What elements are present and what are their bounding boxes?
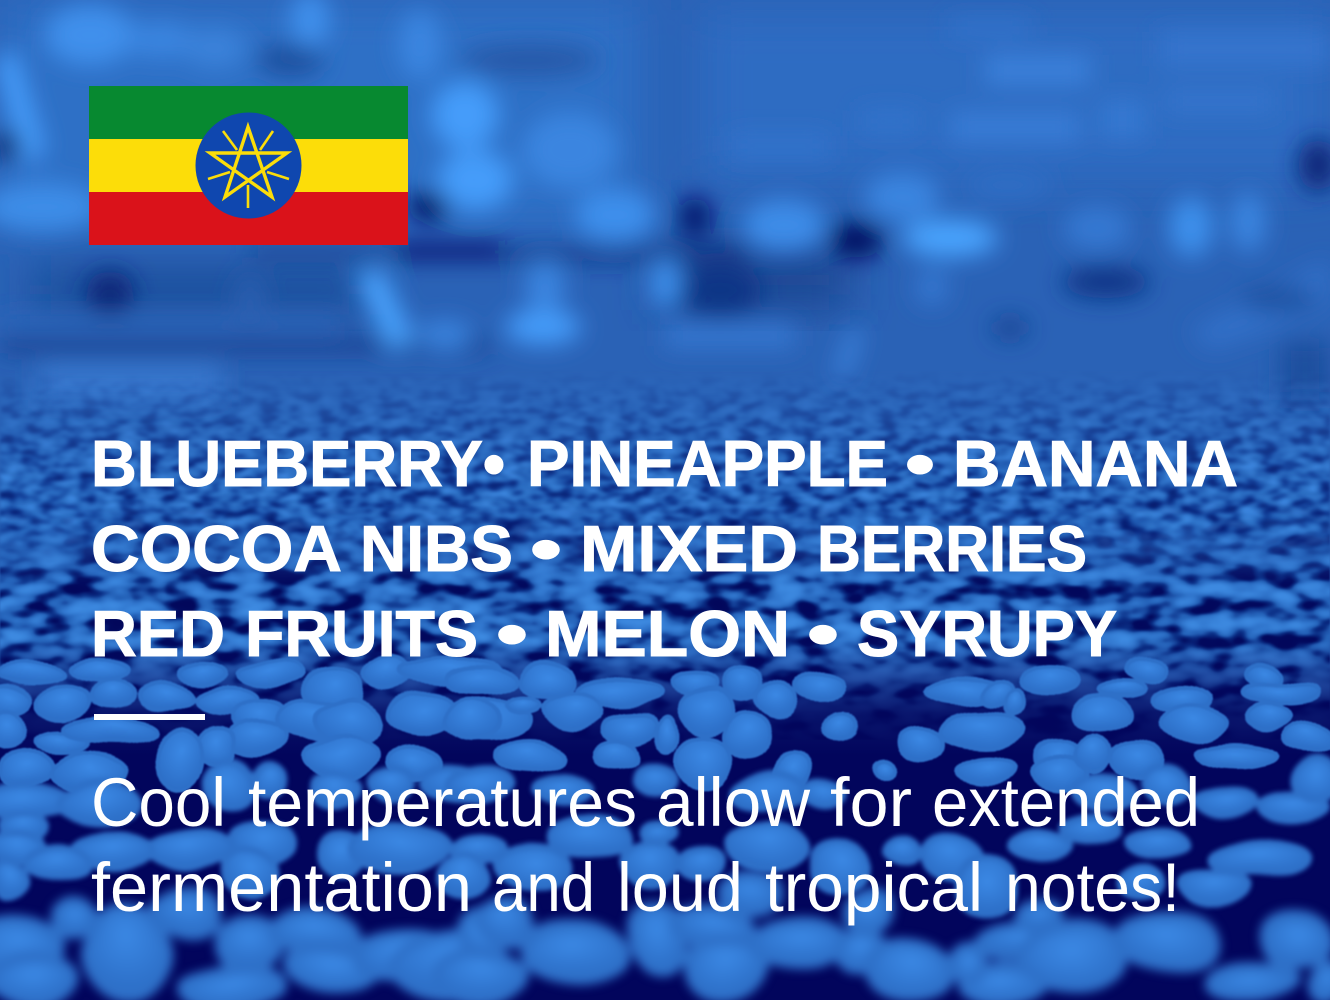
flavor notes heading: SYRUPY [857, 597, 1117, 670]
flavor notes heading: FRUITS [245, 597, 478, 670]
description text: fermentation [91, 849, 472, 926]
flavor notes heading: BERRIES [817, 512, 1087, 585]
flavor notes heading: • [530, 512, 562, 585]
description text: loud [617, 849, 743, 926]
background: small beans mid distance [0, 370, 1330, 1000]
background: sharper beans row [0, 656, 1330, 793]
flag of Ethiopia [89, 86, 408, 245]
divider rule [94, 714, 205, 720]
flavor notes heading: BANANA [953, 427, 1238, 500]
background: blurred foreground beans [0, 876, 1330, 1000]
flavor notes heading: • [807, 597, 839, 670]
description text: tropical [765, 849, 983, 926]
description text: notes! [1005, 849, 1180, 926]
description text: allow [656, 764, 810, 841]
background: mid foreground beans [0, 760, 1330, 917]
flag emblem: blue disc with star [196, 112, 302, 218]
description text: extended [932, 764, 1200, 841]
flavor notes heading: NIBS [360, 512, 513, 585]
description text: and [492, 849, 595, 926]
description text: for [830, 764, 912, 841]
description text: temperatures [248, 764, 637, 841]
description text: Cool [91, 764, 226, 841]
description text [91, 764, 1200, 926]
flavor notes heading: PINEAPPLE [527, 427, 888, 500]
flavor notes heading: MELON [545, 597, 790, 670]
flavor notes heading: MIXED [580, 512, 798, 585]
flavor notes heading: • [905, 427, 935, 500]
flavor notes heading [91, 427, 1238, 670]
flavor notes heading: COCOA [91, 512, 342, 585]
flavor notes heading: • [496, 597, 528, 670]
flavor notes heading: RED [91, 597, 225, 670]
flavor notes heading: BLUEBERRY• [91, 427, 505, 500]
